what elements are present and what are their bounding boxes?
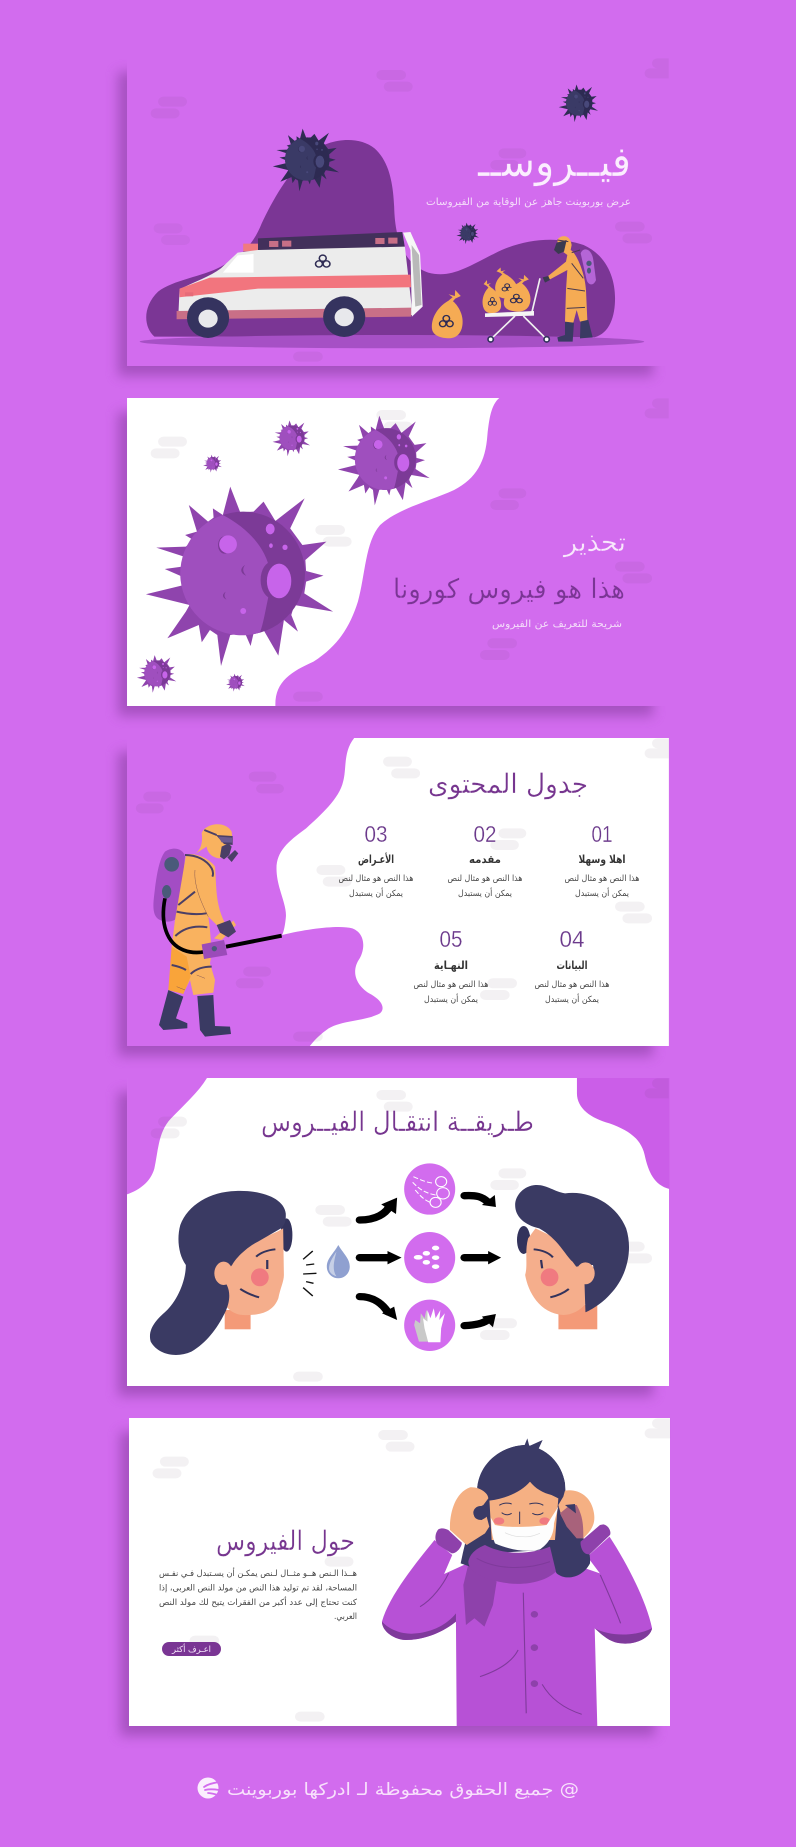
arrows: [360, 1195, 501, 1327]
slide 1: cover: [118, 58, 669, 376]
heading: this is corona: هذا هو فيروس كورونا: [393, 574, 625, 605]
item 02: مقدمه: [469, 853, 501, 866]
worker spraying: [153, 824, 282, 1037]
paragraph: المساحة، لقد تم توليد هذا النص من مولد النص العربى، إذا: [159, 1584, 357, 1594]
paragraph: [159, 1567, 358, 1622]
item 03: يمكن أن يستبدل: [349, 887, 404, 899]
item 03: [338, 821, 414, 899]
item 01: [564, 821, 640, 899]
white wave panel: [276, 738, 669, 1046]
paragraph: كنت تحتاج إلى عدد أكبر من الفقرات يتيح لك مولد النص: [159, 1596, 358, 1608]
item 03: هذا النص هو مثال لنص: [338, 874, 414, 884]
button: learn more: [162, 1642, 221, 1656]
item 03: 03: [364, 821, 388, 847]
item 02: يمكن أن يستبدل: [458, 887, 513, 899]
title: transmission: طـريقــة انتقـال الفيــروس: [261, 1107, 534, 1138]
ground shadow: [140, 335, 644, 348]
virus: small top: [273, 420, 310, 456]
worker pushing cart: [543, 236, 596, 342]
item 05: هذا النص هو مثال لنص: [414, 980, 488, 990]
sneeze lines: [303, 1251, 316, 1296]
footer: [198, 1778, 579, 1800]
icon: gloves: [404, 1300, 455, 1351]
boy face: [515, 1185, 629, 1329]
biohazard bag: [432, 290, 463, 338]
icon: logo: [198, 1778, 219, 1798]
scarf: [468, 1545, 556, 1584]
item 02: هذا النص هو مثال لنص: [448, 874, 522, 884]
virus: small: [456, 223, 479, 244]
droplet: [327, 1245, 350, 1278]
item 05: 05: [440, 926, 462, 952]
item 01: هذا النص هو مثال لنص: [564, 874, 640, 884]
heading: warning: تحذير: [562, 528, 626, 558]
icon: cough: [404, 1163, 455, 1215]
button: learn more: اعـرف أكثر: [171, 1643, 211, 1655]
virus: top right: [559, 84, 598, 122]
coat: [382, 1537, 652, 1726]
paragraph: هــذا الـنص هــو مثــال لـنص يمكـن أن يسـتبدل فـي نفـس: [159, 1567, 357, 1579]
hands: [450, 1487, 489, 1545]
item 04: البيانات: [556, 959, 588, 972]
corner blob left: [127, 1078, 207, 1194]
item 03: الأعـراض: [358, 852, 394, 866]
white wave panel: [127, 398, 499, 706]
girl face: [150, 1191, 292, 1355]
virus: tiny bottom: [226, 674, 245, 692]
title: virus: فيــروســ: [477, 137, 631, 186]
item 04: يمكن أن يستبدل: [545, 993, 600, 1005]
title: contents: جدول المحتوى: [428, 769, 588, 800]
subtitle: عرض بوربوينت جاهز عن الوقاية من الفيروسات: [426, 197, 631, 208]
virus: large dark: [273, 129, 339, 191]
item 01: اهلا وسهلا: [578, 853, 626, 866]
item 05: النهـاية: [434, 959, 468, 972]
item 04: 04: [560, 926, 585, 952]
ambulance: [177, 232, 423, 338]
corner blob right: [577, 1078, 669, 1189]
icon: droplets: [404, 1232, 455, 1283]
caption: شريحة للتعريف عن الفيروس: [492, 619, 622, 630]
slide 5: about: [120, 1418, 670, 1736]
virus: medium: [338, 416, 430, 505]
item 02: [448, 821, 522, 899]
slide 2: warning: [118, 398, 669, 716]
item 01: 01: [592, 821, 612, 847]
virus: tiny top: [203, 455, 222, 473]
virus: large: [146, 487, 333, 666]
virus: bottom left: [137, 655, 176, 693]
item 01: يمكن أن يستبدل: [575, 887, 630, 899]
cart: [485, 278, 549, 342]
item 02: 02: [474, 821, 496, 847]
mask: [491, 1507, 558, 1551]
woman's head and hands: [435, 1438, 610, 1584]
cuffs: [435, 1528, 462, 1553]
copyright text: @ جميع الحقوق محفوظة لـ ادركها بوربوينت: [227, 1780, 579, 1800]
slide 4: transmission: [118, 1078, 669, 1396]
item 05: يمكن أن يستبدل: [424, 993, 479, 1005]
dark purple blob: [146, 140, 615, 337]
slide 3: table of contents: [118, 738, 669, 1056]
item 04: هذا النص هو مثال لنص: [534, 980, 610, 990]
title: about: حول الفيروس: [216, 1526, 355, 1557]
bags in cart: [483, 267, 530, 313]
item 05: [414, 926, 488, 1005]
paragraph: العربي.: [334, 1612, 357, 1622]
item 04: [534, 926, 610, 1005]
